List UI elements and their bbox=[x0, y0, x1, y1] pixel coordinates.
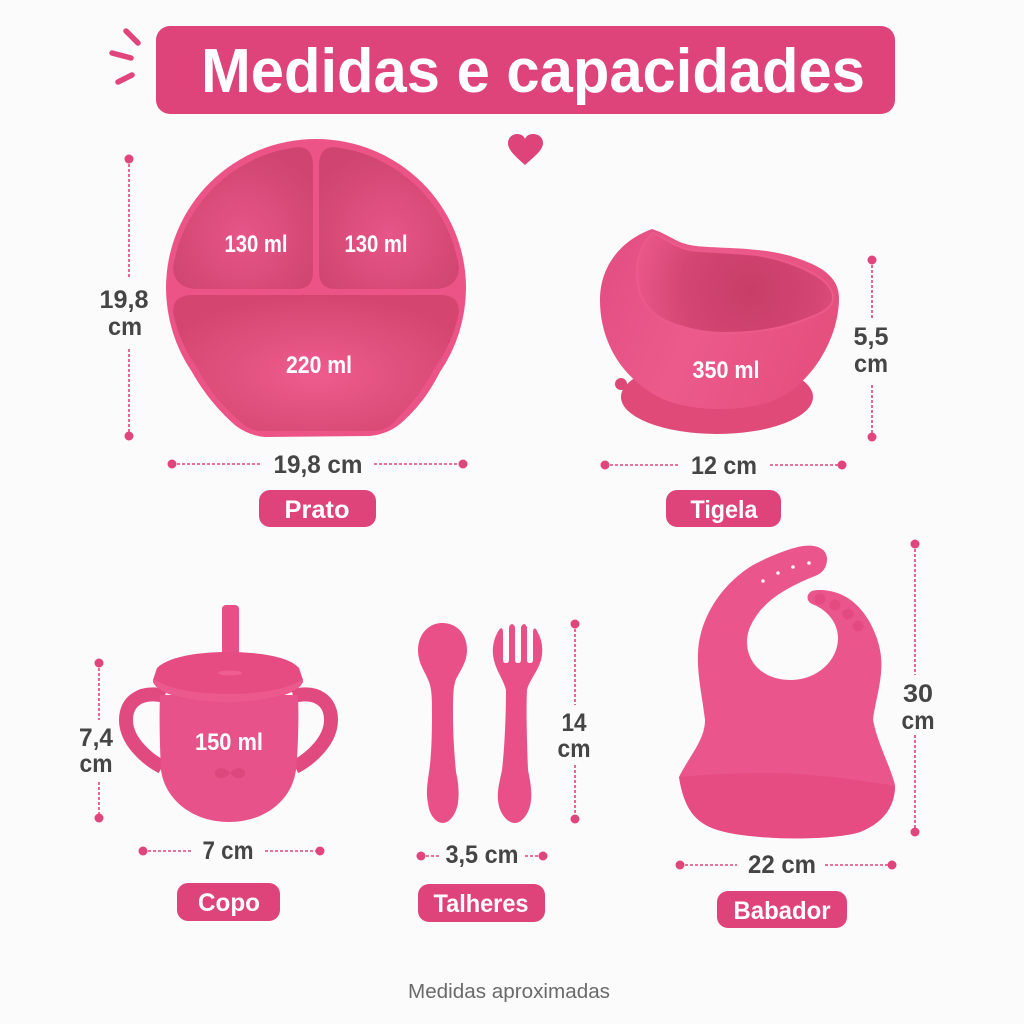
dimension: bib height: 30 bbox=[903, 680, 933, 708]
label: copo bbox=[177, 883, 280, 921]
dimension: plate width: 19,8 cm bbox=[274, 451, 362, 479]
dimension: cup height: cm bbox=[80, 750, 112, 778]
dimension: plate height: cm bbox=[108, 313, 142, 341]
bowl illustration bbox=[600, 229, 839, 434]
label: prato bbox=[259, 490, 376, 527]
plate illustration: 130 ml bbox=[224, 231, 288, 258]
label: tigela: Tigela bbox=[690, 496, 759, 524]
panel: talheres bbox=[416, 620, 590, 922]
dimension: bib height: cm bbox=[902, 707, 934, 735]
plate illustration bbox=[166, 139, 466, 437]
dimension: bib height bbox=[902, 540, 934, 836]
panel: babador bbox=[676, 540, 934, 928]
dimension: cutlery height: cm bbox=[558, 735, 590, 763]
dimension: cutlery width bbox=[416, 841, 548, 869]
dimension: cutlery height bbox=[558, 620, 590, 824]
label: babador: Babador bbox=[734, 897, 831, 925]
footnote: Medidas aproximadas bbox=[408, 981, 610, 1003]
dimension: bowl height: 5,5 bbox=[854, 323, 889, 351]
panel: tigela bbox=[600, 229, 889, 527]
dimension: bib width bbox=[676, 851, 896, 879]
dimension: cup height: 7,4 bbox=[79, 724, 113, 752]
fork illustration bbox=[493, 624, 542, 823]
label: babador bbox=[717, 891, 847, 928]
label: talheres bbox=[418, 884, 545, 922]
dimension: bib width: 22 cm bbox=[748, 851, 816, 879]
dimension: cutlery height: 14 bbox=[562, 709, 587, 737]
dimension: cup width bbox=[138, 837, 324, 865]
icon: sparkle strokes bbox=[112, 31, 138, 82]
icon: heart bbox=[508, 134, 543, 165]
cup illustration bbox=[126, 605, 331, 822]
label: copo: Copo bbox=[198, 889, 260, 917]
label: talheres: Talheres bbox=[434, 890, 528, 918]
bib illustration bbox=[679, 546, 895, 838]
dimension: plate height: 19,8 bbox=[100, 286, 149, 314]
label: prato: Prato bbox=[284, 496, 350, 524]
panel: copo bbox=[79, 605, 331, 921]
plate illustration: 130 ml bbox=[344, 231, 408, 258]
dimension: plate height bbox=[100, 154, 149, 440]
label: tigela bbox=[666, 490, 781, 527]
dimension: bowl width bbox=[600, 452, 846, 480]
plate illustration: 220 ml bbox=[286, 352, 352, 379]
bowl illustration: 350 ml bbox=[692, 357, 760, 384]
dimension: cup height bbox=[79, 658, 113, 822]
dimension: bowl height: cm bbox=[854, 350, 888, 378]
title banner: Medidas e capacidades bbox=[201, 37, 865, 106]
cup illustration: 150 ml bbox=[195, 729, 263, 756]
dimension: cutlery width: 3,5 cm bbox=[446, 841, 518, 869]
dimension: plate width bbox=[168, 451, 468, 479]
panel: prato bbox=[100, 139, 468, 527]
dimension: bowl height bbox=[854, 256, 889, 442]
spoon illustration bbox=[418, 623, 467, 823]
dimension: bowl width: 12 cm bbox=[691, 452, 757, 480]
dimension: cup width: 7 cm bbox=[202, 837, 254, 865]
